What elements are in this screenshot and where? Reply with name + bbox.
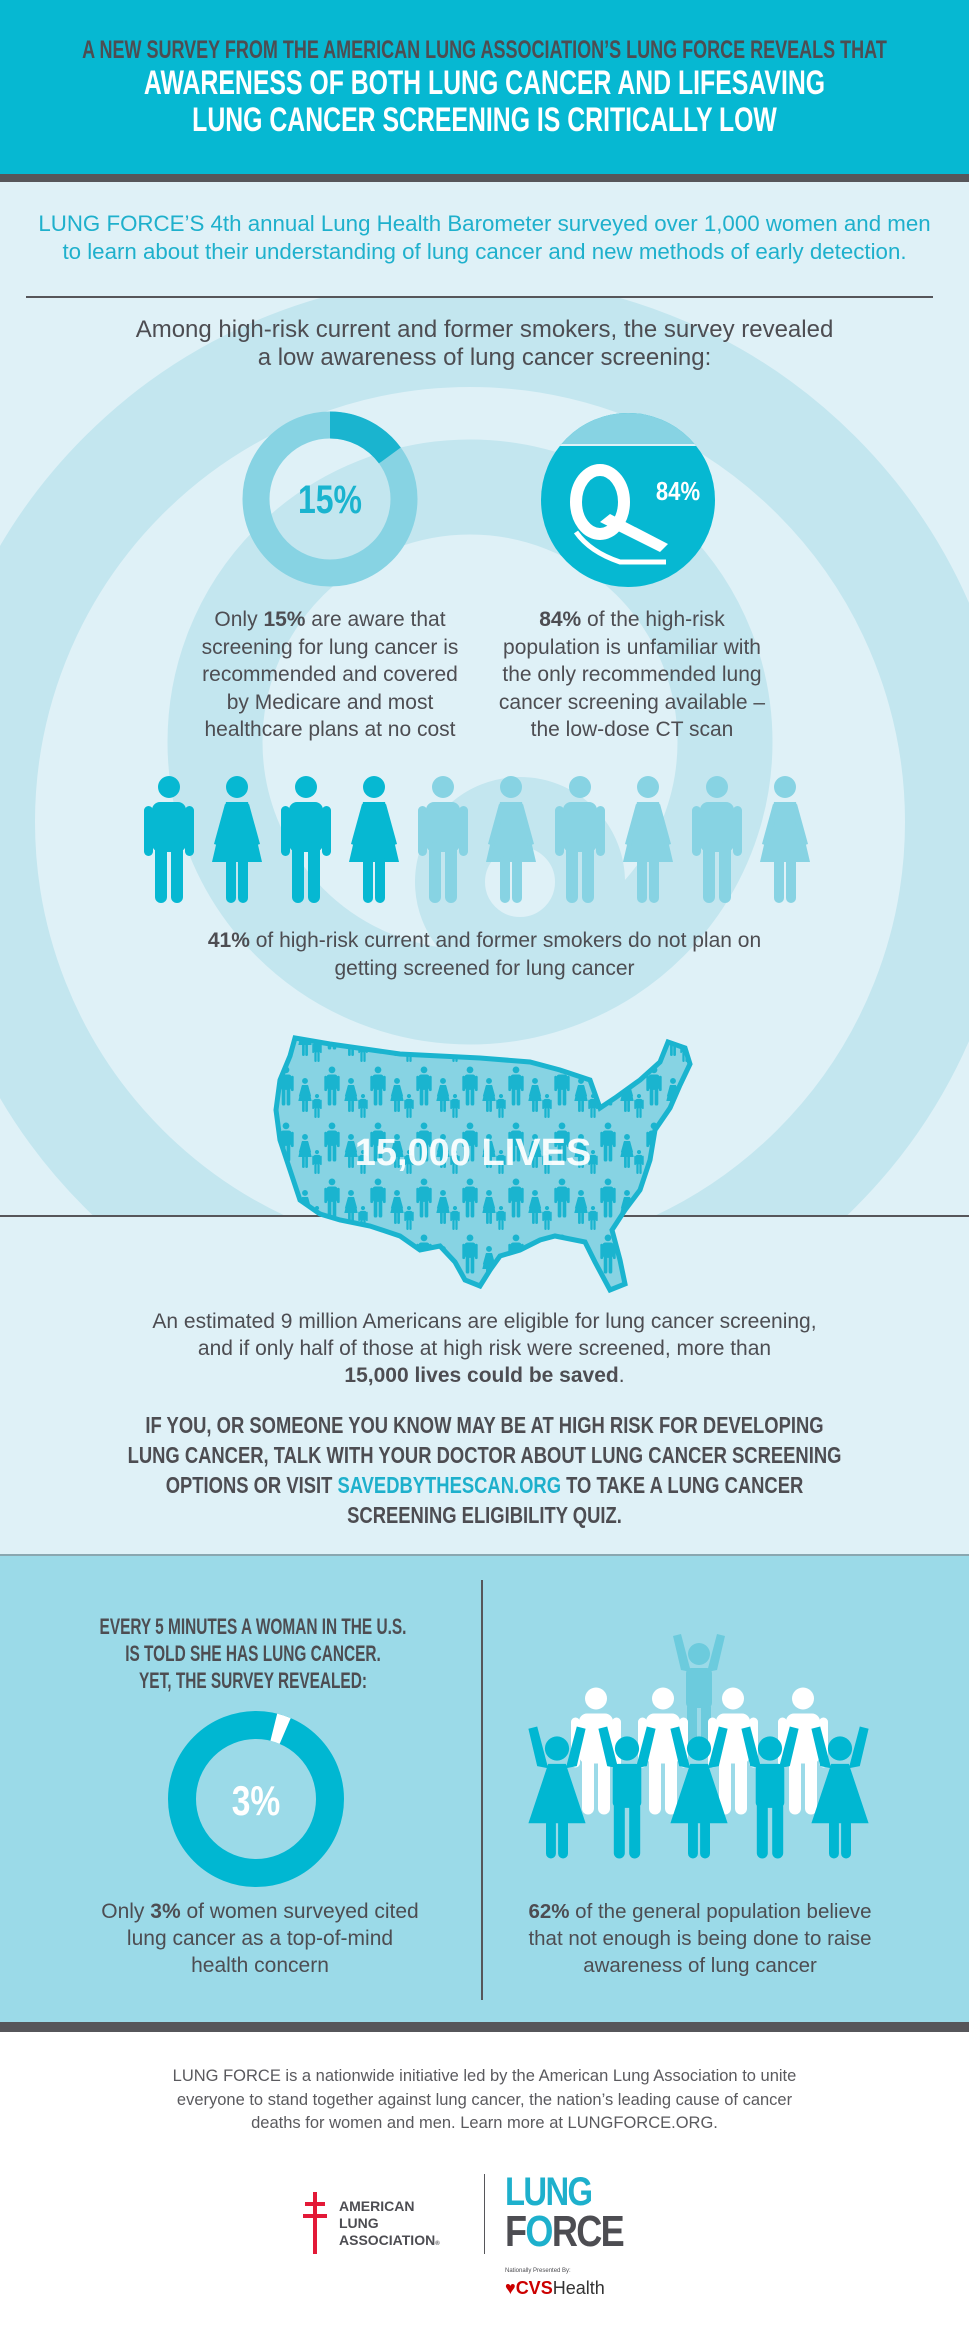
- logo: Lung Force: [505, 2170, 624, 2256]
- text: 3%: health concern: [191, 1954, 329, 1977]
- text: 3%: Only 3% of women surveyed cited: [101, 1900, 419, 1923]
- title: [144, 64, 825, 139]
- title: LUNG CANCER SCREENING IS CRITICALLY LOW: [192, 101, 777, 139]
- text: 3%: lung cancer as a top-of-mind: [127, 1927, 393, 1950]
- logo: CVS Health: [505, 2268, 605, 2298]
- icon: crowd: [528, 1634, 869, 1858]
- call to action: LUNG CANCER, TALK WITH YOUR DOCTOR ABOUT LUNG CANCER SCREENING: [128, 1442, 841, 1468]
- logo: American Lung Association: ASSOCIATION®: [339, 2232, 440, 2248]
- logo: Lung Force: FORCE: [505, 2207, 623, 2256]
- header kicker: A NEW SURVEY FROM THE AMERICAN LUNG ASSOCIATION’S LUNG FORCE REVEALS THAT: [82, 36, 887, 64]
- subheading: Among high-risk current and former smokers, the survey revealed: [136, 316, 833, 343]
- text: 15%: screening for lung cancer is: [202, 636, 458, 658]
- donut 15%: [242, 412, 418, 586]
- text: 41%: [208, 929, 761, 980]
- footer text: LUNG FORCE is a nationwide initiative led by the American Lung Association to unite: [173, 2067, 796, 2085]
- subheading: a low awareness of lung cancer screening:: [258, 344, 711, 371]
- icon: CT scanner 84%: [541, 413, 715, 587]
- text: 41%: getting screened for lung cancer: [334, 957, 635, 980]
- text: 62%: that not enough is being done to raise: [528, 1927, 872, 1950]
- heading: every 5 minutes: EVERY 5 MINUTES A WOMAN IN THE U.S.: [100, 1614, 406, 1639]
- donut 3%: 3%: [232, 1779, 280, 1825]
- text: 9 million: An estimated 9 million Americans are eligible for lung cancer screening,: [152, 1310, 817, 1333]
- call to action: [128, 1412, 841, 1528]
- intro text: to learn about their understanding of lung cancer and new methods of early detection.: [62, 239, 907, 264]
- heading: every 5 minutes: IS TOLD SHE HAS LUNG CANCER.: [125, 1641, 381, 1666]
- subheading: [136, 316, 833, 371]
- footer text: deaths for women and men. Learn more at LUNGFORCE.ORG.: [251, 2114, 718, 2132]
- icon: CT scanner 84%: 84%: [656, 477, 700, 506]
- logo: American Lung Association: [303, 2192, 440, 2254]
- text: 84%: the low-dose CT scan: [531, 718, 733, 741]
- title: AWARENESS OF BOTH LUNG CANCER AND LIFESAVING: [144, 64, 825, 102]
- footer text: [173, 2067, 796, 2132]
- call to action: IF YOU, OR SOMEONE YOU KNOW MAY BE AT HIGH RISK FOR DEVELOPING: [145, 1412, 824, 1438]
- logo: Lung Force: LUNG: [505, 2170, 591, 2214]
- text: 62%: awareness of lung cancer: [583, 1954, 817, 1977]
- text: 84%: [499, 608, 766, 741]
- people row 41%: [144, 776, 810, 903]
- map: 15,000 lives: [274, 1035, 693, 1294]
- call to action: SCREENING ELIGIBILITY QUIZ.: [347, 1502, 622, 1528]
- call to action: OPTIONS OR VISIT SAVEDBYTHESCAN.ORG TO TAKE A LUNG CANCER: [166, 1472, 803, 1498]
- text: 15%: [202, 608, 458, 741]
- logo: American Lung Association: LUNG: [339, 2215, 379, 2231]
- text: 84%: 84% of the high-risk: [539, 608, 725, 631]
- text: 15%: recommended and covered: [202, 663, 458, 686]
- heading: every 5 minutes: YET, THE SURVEY REVEALED:: [139, 1668, 367, 1693]
- text: 15%: healthcare plans at no cost: [204, 718, 456, 741]
- light section background with spiral: [0, 182, 969, 1555]
- intro text: LUNG FORCE’S 4th annual Lung Health Barometer surveyed over 1,000 women and men: [38, 211, 931, 236]
- text: 15%: Only 15% are aware that: [214, 608, 446, 631]
- footer text: everyone to stand together against lung cancer, the nation’s leading cause of cancer: [177, 2090, 792, 2108]
- intro text: [38, 211, 931, 264]
- panel: women & general population: [0, 1554, 969, 2030]
- text: 84%: population is unfamiliar with: [503, 636, 761, 658]
- text: 84%: cancer screening available –: [499, 690, 765, 714]
- text: 15%: by Medicare and most: [227, 690, 433, 714]
- text: 62%: [528, 1900, 872, 1977]
- text: 41%: 41% of high-risk current and former smokers do not plan on: [208, 929, 761, 952]
- text: 84%: the only recommended lung: [502, 663, 762, 686]
- text: 9 million: [152, 1310, 817, 1387]
- logo: American Lung Association: AMERICAN: [339, 2198, 414, 2214]
- donut 15%: 15%: [298, 477, 362, 522]
- header band: [0, 0, 969, 174]
- heading: every 5 minutes: [100, 1614, 406, 1693]
- text: 62%: 62% of the general population believe: [528, 1900, 872, 1923]
- text: 3%: [101, 1900, 419, 1977]
- map: 15,000 lives: 15,000 LIVES: [355, 1132, 591, 1174]
- text: 9 million: 15,000 lives could be saved.: [344, 1364, 625, 1387]
- logo: CVS Health: ♥CVSHealth: [505, 2278, 605, 2298]
- donut 3%: [168, 1711, 344, 1887]
- logo: CVS Health: Nationally Presented By:: [505, 2268, 571, 2274]
- text: 9 million: and if only half of those at high risk were screened, more than: [198, 1337, 771, 1360]
